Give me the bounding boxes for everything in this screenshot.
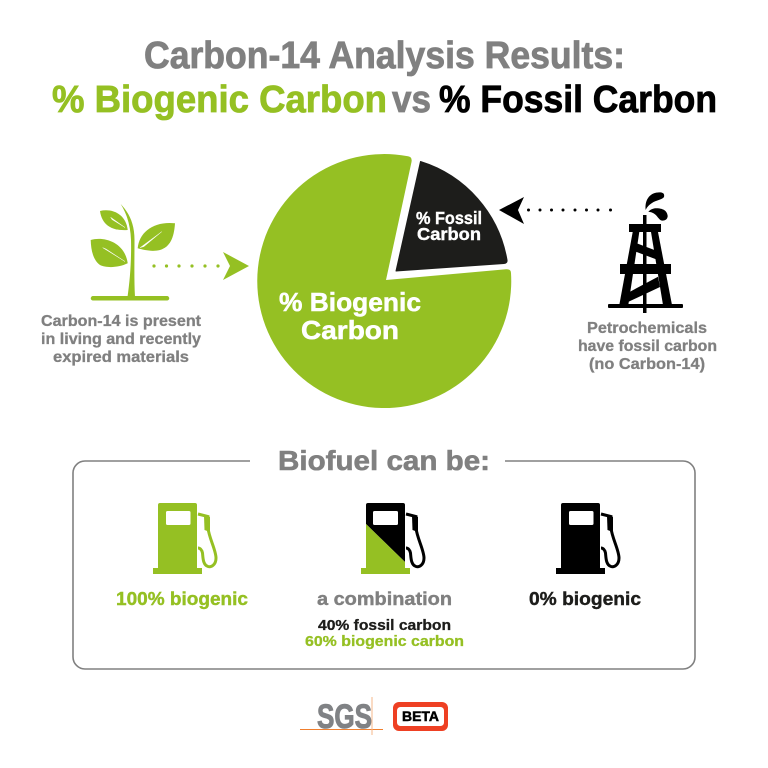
text: petrochemicals: have fossil carbon: [578, 338, 717, 355]
icon: mixed pump: [361, 503, 424, 574]
text: petrochemicals: (no Carbon-14): [589, 356, 705, 373]
label: a combination: a combination: [317, 589, 452, 609]
title line 2: biogenic: % Biogenic Carbon: [52, 79, 387, 121]
pie chart: [257, 154, 511, 408]
label: 100% biogenic: 100% biogenic: [116, 589, 248, 609]
label: 0% biogenic: 0% biogenic: [529, 589, 641, 609]
text: carbon-14 present: in living and recently: [41, 331, 201, 348]
text: petrochemicals: [578, 320, 717, 373]
title line 1: Carbon-14 Analysis Results:: [144, 35, 625, 77]
icon: plant: [91, 204, 175, 298]
panel: biofuel: [73, 445, 695, 669]
logo: BETA: BETA: [402, 708, 439, 724]
text: petrochemicals: Petrochemicals: [587, 320, 707, 337]
panel heading: Biofuel can be:: [278, 445, 490, 476]
pie label: fossil: Carbon: [417, 224, 481, 244]
label: 40% fossil carbon: 40% fossil carbon: [318, 618, 451, 634]
icon: black pump: [556, 503, 619, 574]
logo: SGS: SGS: [317, 698, 372, 736]
logo: BETA: [393, 702, 448, 731]
title line 2: fossil: % Fossil Carbon: [439, 79, 717, 121]
pie label: biogenic: Carbon: [301, 315, 399, 345]
label: 60% biogenic carbon: 60% biogenic carbon: [305, 634, 464, 650]
icon: green pump: [153, 503, 216, 574]
panel border: [73, 461, 695, 669]
arrow: plant to pie: [152, 252, 249, 280]
pie slice: biogenic: [257, 154, 511, 408]
icon: oil rig: [608, 192, 683, 313]
pie slice: fossil: [396, 162, 507, 271]
text: carbon-14 present: expired materials: [53, 349, 189, 366]
pie label: biogenic: % Biogenic: [279, 287, 421, 317]
text: carbon-14 present: [41, 313, 201, 366]
title: [52, 35, 717, 121]
pie label: fossil: % Fossil: [416, 208, 482, 228]
arrow: rig to pie: [499, 197, 612, 224]
pie label: biogenic: [279, 287, 421, 345]
title line 2: vs: vs: [392, 79, 431, 121]
pie label: fossil: [416, 208, 482, 244]
text: carbon-14 present: Carbon-14 is present: [41, 313, 201, 330]
